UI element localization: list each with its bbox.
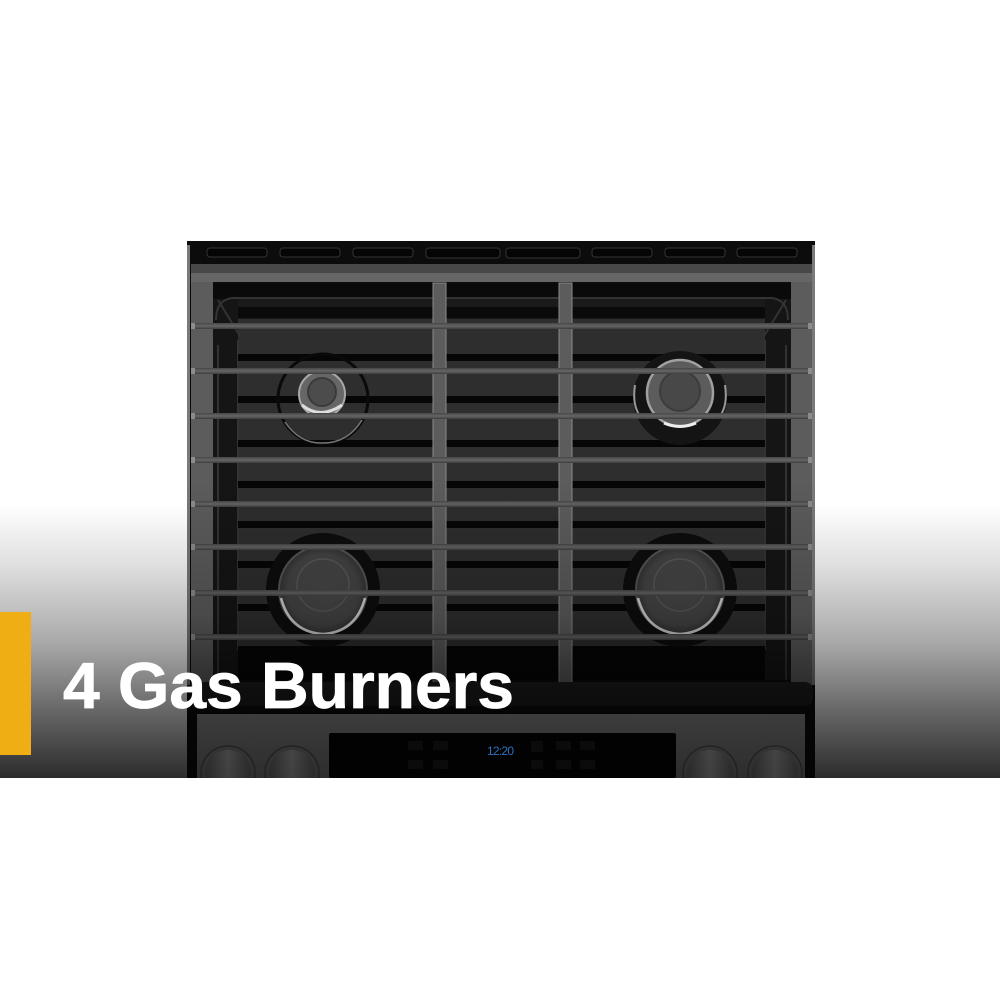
grate side rails xyxy=(191,265,812,690)
grate horizontal bars xyxy=(191,323,812,640)
display panel xyxy=(329,733,676,778)
knobs xyxy=(217,750,786,778)
burner: front left xyxy=(266,533,380,647)
basin edge streaks xyxy=(216,298,788,680)
grate rear bar xyxy=(191,264,812,282)
bar end highlights xyxy=(191,323,812,640)
gradient backdrop band xyxy=(0,350,1000,778)
burner: rear right xyxy=(633,351,727,445)
title: 4 Gas Burners xyxy=(63,649,514,722)
grate vertical bars xyxy=(433,283,572,683)
touch keys xyxy=(408,741,595,769)
clock readout: 12:20 xyxy=(487,744,514,758)
lower shading over range xyxy=(187,480,815,778)
bar shadows on basin xyxy=(238,354,765,680)
control panel xyxy=(197,714,805,778)
infographic canvas xyxy=(0,241,1000,778)
knob dial arcs xyxy=(200,745,802,778)
rear vent strip xyxy=(207,248,797,258)
cooktop basin xyxy=(238,319,765,646)
accent bar xyxy=(0,612,31,755)
range cooktop xyxy=(187,241,815,800)
front grate lip xyxy=(191,682,813,697)
burner: front right xyxy=(623,533,737,647)
burner: rear left xyxy=(278,354,368,444)
side frame edges xyxy=(187,245,815,685)
